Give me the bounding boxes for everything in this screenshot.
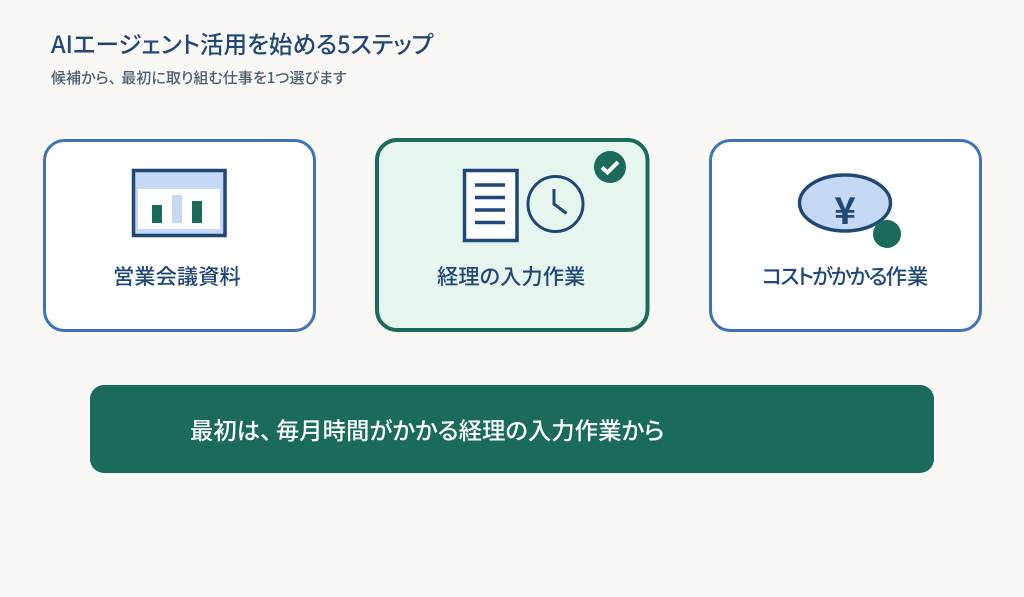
icon: yen coin (800, 175, 901, 248)
subtitle: 候補から、最初に取り組む仕事を1つ選びます (51, 67, 347, 88)
card label: sales: 営業会議資料 (113, 260, 241, 291)
title: AIエージェント活用を始める5ステップ (51, 26, 433, 60)
banner text: 最初は、毎月時間がかかる経理の入力作業から (190, 412, 664, 446)
icon: check badge (594, 151, 626, 183)
icon: document (464, 170, 517, 240)
panel: cost card (710, 140, 980, 330)
panel: sales meeting card (44, 140, 314, 330)
icon: chart window (134, 170, 225, 236)
panel: accounting card (377, 140, 648, 330)
icon: clock (528, 176, 583, 232)
banner (90, 385, 934, 473)
card label: accounting: 経理の入力作業 (437, 260, 585, 291)
card label: cost: コストがかかる作業 (762, 260, 928, 291)
icon: yen coin: ¥ (834, 181, 856, 235)
